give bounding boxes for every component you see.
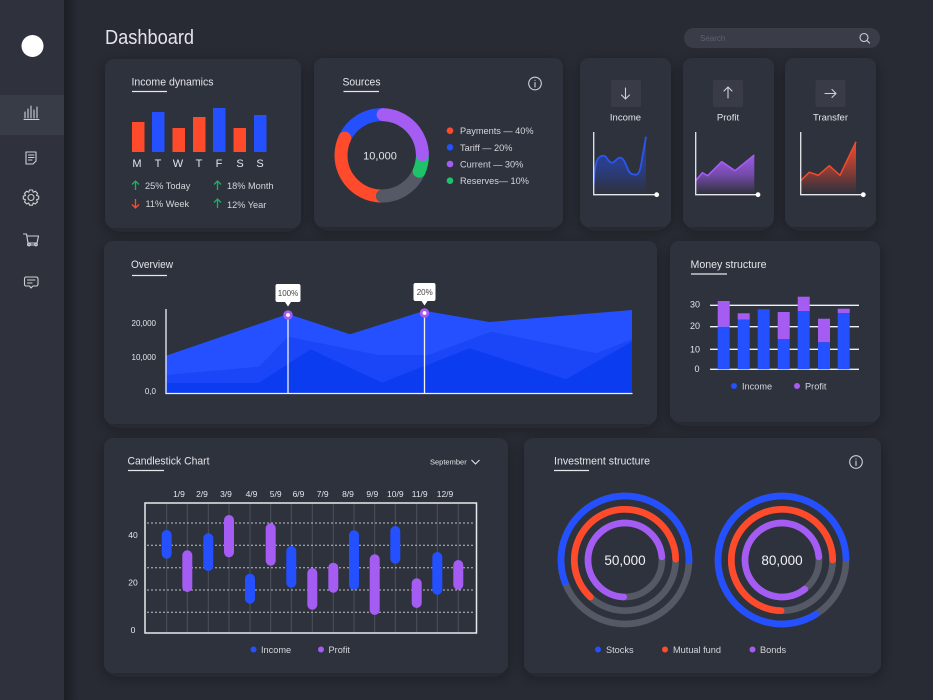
axis labels: 20 <box>128 578 138 588</box>
legend <box>447 126 534 186</box>
panel: transfer mini chart <box>785 58 876 227</box>
area chart <box>801 132 866 197</box>
axis labels: 0 <box>694 364 700 374</box>
icon: bar chart <box>24 106 39 120</box>
donut chart <box>328 101 436 209</box>
search bar <box>684 28 880 48</box>
label: Income <box>610 112 641 124</box>
date labels: 9/9 <box>366 489 378 499</box>
icon: info <box>850 456 862 468</box>
sidebar <box>0 0 64 700</box>
panel: money structure <box>670 241 880 422</box>
day labels: F <box>216 158 223 170</box>
axis labels: 0 <box>131 625 136 635</box>
heading: Investment structure <box>554 456 650 468</box>
title: Dashboard <box>105 27 194 49</box>
panel: investment structure <box>524 438 881 673</box>
day labels <box>132 158 264 170</box>
axis labels: 20 <box>690 321 700 331</box>
active menu row <box>0 95 64 135</box>
axis labels <box>132 319 157 396</box>
legend: Tariff — 20% <box>460 143 512 153</box>
date labels: 5/9 <box>270 489 282 499</box>
legend: Bonds <box>760 645 786 655</box>
legend: Stocks <box>606 645 634 655</box>
label: Profit <box>717 112 739 124</box>
area chart <box>166 309 632 394</box>
axis labels: 10 <box>690 344 700 354</box>
icon: up arrow <box>713 80 743 107</box>
date labels: 11/9 <box>412 489 428 499</box>
icon: info <box>529 77 541 90</box>
date labels: 6/9 <box>293 489 305 499</box>
search bar: Search <box>700 34 725 43</box>
value: 80,000 <box>761 553 803 568</box>
icon: gear <box>23 190 39 205</box>
panel: candlestick chart <box>104 438 508 673</box>
value: 50,000 <box>604 553 646 568</box>
panel: income dynamics <box>105 59 301 228</box>
date labels: 1/9 <box>173 489 185 499</box>
heading: Sources <box>342 76 381 88</box>
date labels: 2/9 <box>196 489 208 499</box>
icon: chat <box>24 277 38 288</box>
icon: document <box>26 152 36 164</box>
legend: Income <box>742 382 772 392</box>
bar chart <box>132 108 266 152</box>
date labels: 12/9 <box>437 489 454 499</box>
axis labels <box>690 300 700 374</box>
marker: 20% <box>414 283 436 318</box>
donut value: 10,000 <box>363 150 397 162</box>
date labels: 3/9 <box>220 489 232 499</box>
icon: cart <box>24 234 38 246</box>
axis labels: 0,0 <box>145 387 157 396</box>
radial chart: 50,000 <box>541 476 709 644</box>
legend: Current — 30% <box>460 160 523 170</box>
day labels: S <box>236 158 244 170</box>
legend: Profit <box>328 645 350 655</box>
legend: Mutual fund <box>673 645 721 655</box>
day labels: S <box>256 158 264 170</box>
date labels <box>173 489 454 499</box>
stat: 11% week: 11% Week <box>146 199 189 209</box>
date labels: 7/9 <box>317 489 329 499</box>
icon: right arrow <box>816 80 846 107</box>
panel: overview <box>104 241 657 424</box>
logo circle <box>22 35 44 57</box>
icon: search <box>860 34 870 43</box>
stacked bar chart <box>710 297 859 369</box>
marker: 100% <box>276 284 300 320</box>
axis labels: 10,000 <box>132 353 157 362</box>
stat: 25% today: 25% Today <box>145 181 191 191</box>
label: Transfer <box>813 112 848 124</box>
day labels: W <box>173 158 184 170</box>
legend <box>250 645 350 655</box>
legend: Payments — 40% <box>460 126 534 136</box>
heading: Overview <box>131 259 173 271</box>
stat: 12% year: 12% Year <box>227 200 266 210</box>
area chart <box>696 132 760 197</box>
heading: Candlestick Chart <box>128 456 210 468</box>
axis labels <box>128 530 138 635</box>
stat: 18% month: 18% Month <box>227 181 273 191</box>
panel: sources <box>314 58 563 227</box>
candlestick plot <box>145 503 476 633</box>
legend <box>731 382 827 392</box>
axis labels: 30 <box>690 300 700 310</box>
date labels: 4/9 <box>246 489 258 499</box>
marker: 100%: 100% <box>278 289 298 298</box>
date labels: 8/9 <box>342 489 354 499</box>
legend: Income <box>261 645 291 655</box>
date labels: 10/9 <box>387 489 404 499</box>
legend: Profit <box>805 382 827 392</box>
heading: Income dynamics <box>132 76 214 88</box>
panel: profit mini chart <box>683 58 774 227</box>
area chart <box>594 132 659 197</box>
panel: income mini chart <box>580 58 671 227</box>
month selector: September <box>430 458 467 466</box>
day labels: T <box>155 158 162 170</box>
icon: down arrow <box>611 80 641 107</box>
axis labels: 40 <box>128 530 138 540</box>
stat: 12% year <box>214 199 266 210</box>
radial chart: 80,000 <box>694 472 870 648</box>
marker: 20%: 20% <box>417 288 433 297</box>
axis labels: 20,000 <box>132 319 157 328</box>
legend <box>595 645 786 655</box>
heading: Money structure <box>690 259 766 271</box>
day labels: M <box>132 158 142 170</box>
legend: Reserves— 10% <box>460 176 529 186</box>
day labels: T <box>196 158 203 170</box>
